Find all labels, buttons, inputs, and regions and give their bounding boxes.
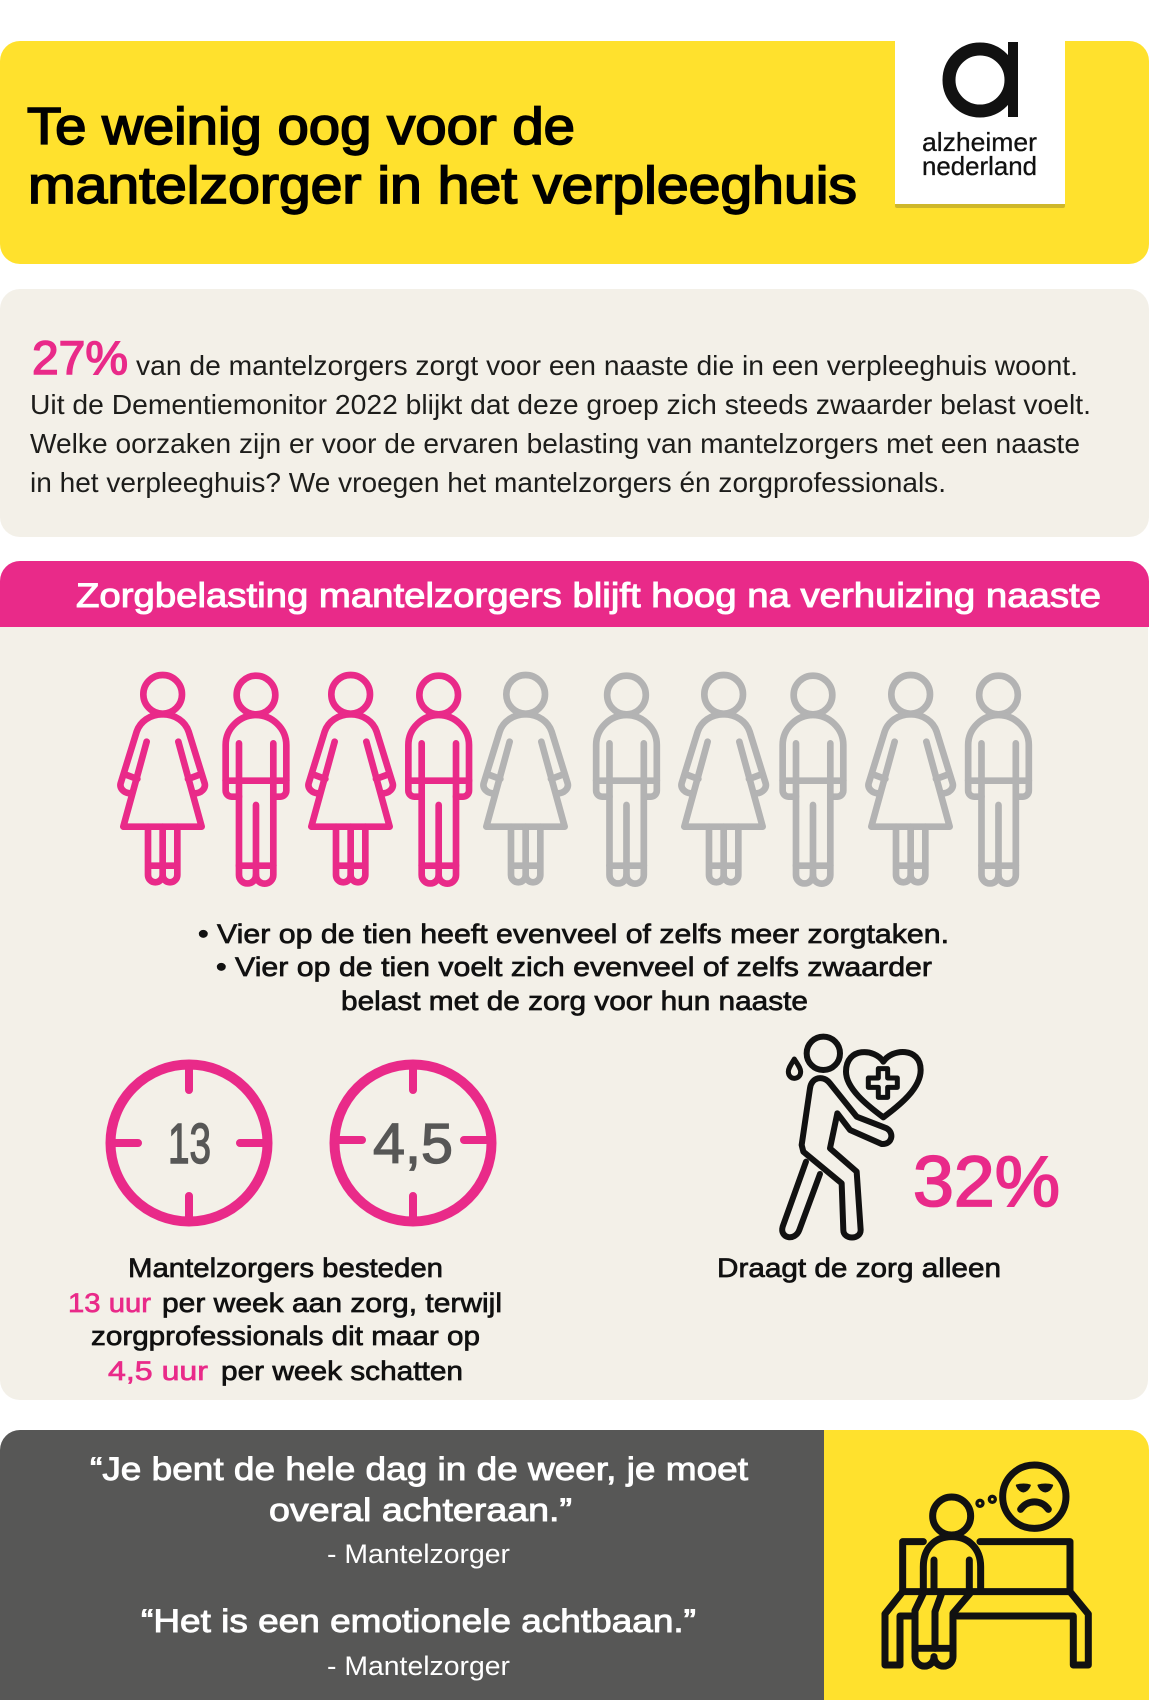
quote 2: “Het is een emotionele achtbaan.” [141,1603,696,1639]
pink heading bar [0,561,1149,627]
logo: alzheimer nederland [895,0,1065,208]
statistic 27%: 27% [32,331,128,384]
bullet text: • Vier op de tien voelt zich evenveel of zelfs zwaarder [216,952,932,982]
title: Te weinig oog voor de [27,98,575,156]
intro text: van de mantelzorgers zorgt voor een naaste die in een verpleeghuis woont. [136,350,1078,381]
bullet text [198,919,949,1016]
quote 1: overal achteraan.” [269,1492,572,1528]
header banner [0,41,1149,264]
intro text: Welke oorzaken zijn er voor de ervaren belasting van mantelzorgers met een naaste [30,428,1080,459]
clock: 13 [110,1064,268,1222]
bullet text: belast met de zorg voor hun naaste [341,986,808,1016]
caption: draagt de zorg alleen: Draagt de zorg alleen [717,1253,1001,1283]
panel: zorgbelasting [0,561,1149,1400]
quote 1: - Mantelzorger [327,1539,510,1569]
icon row: four of ten people [120,675,1029,884]
title: mantelzorger in het verpleeghuis [28,157,857,215]
clock: 13: 13 [168,1112,211,1176]
hours text: 4,5 uur [108,1356,208,1386]
hours text [68,1253,502,1386]
clock: 4,5 [334,1064,492,1222]
logo: alzheimer nederland: alzheimer [922,127,1037,157]
quote 2 [141,1603,696,1681]
quote 2: - Mantelzorger [327,1651,510,1681]
hours text: per week schatten [221,1356,463,1386]
pink heading bar: Zorgbelasting mantelzorgers blijft hoog na verhuizing naaste [76,577,1101,615]
statistic 32%: 32% [913,1143,1060,1222]
panel: yellow icon [824,1430,1149,1700]
intro text [30,350,1091,498]
logo: alzheimer nederland: nederland [922,151,1037,181]
panel: introduction [0,289,1149,537]
hours text: Mantelzorgers besteden [128,1253,443,1283]
hours text: zorgprofessionals dit maar op [91,1321,480,1351]
hours text: per week aan zorg, terwijl [162,1288,502,1318]
intro text: in het verpleeghuis? We vroegen het mantelzorgers én zorgprofessionals. [30,467,946,498]
icon: person on bench with sad thought [885,1465,1088,1666]
quote 1 [90,1451,748,1569]
bullet text: • Vier op de tien heeft evenveel of zelfs meer zorgtaken. [198,919,949,949]
hours text: 13 uur [68,1288,151,1318]
panel: quotes [0,1430,824,1700]
icon: person carrying heart [782,1037,921,1237]
intro text: Uit de Dementiemonitor 2022 blijkt dat deze groep zich steeds zwaarder belast voelt. [30,389,1091,420]
title [27,98,857,215]
clock: 4,5: 4,5 [373,1112,453,1176]
quote 1: “Je bent de hele dag in de weer, je moet [90,1451,748,1487]
